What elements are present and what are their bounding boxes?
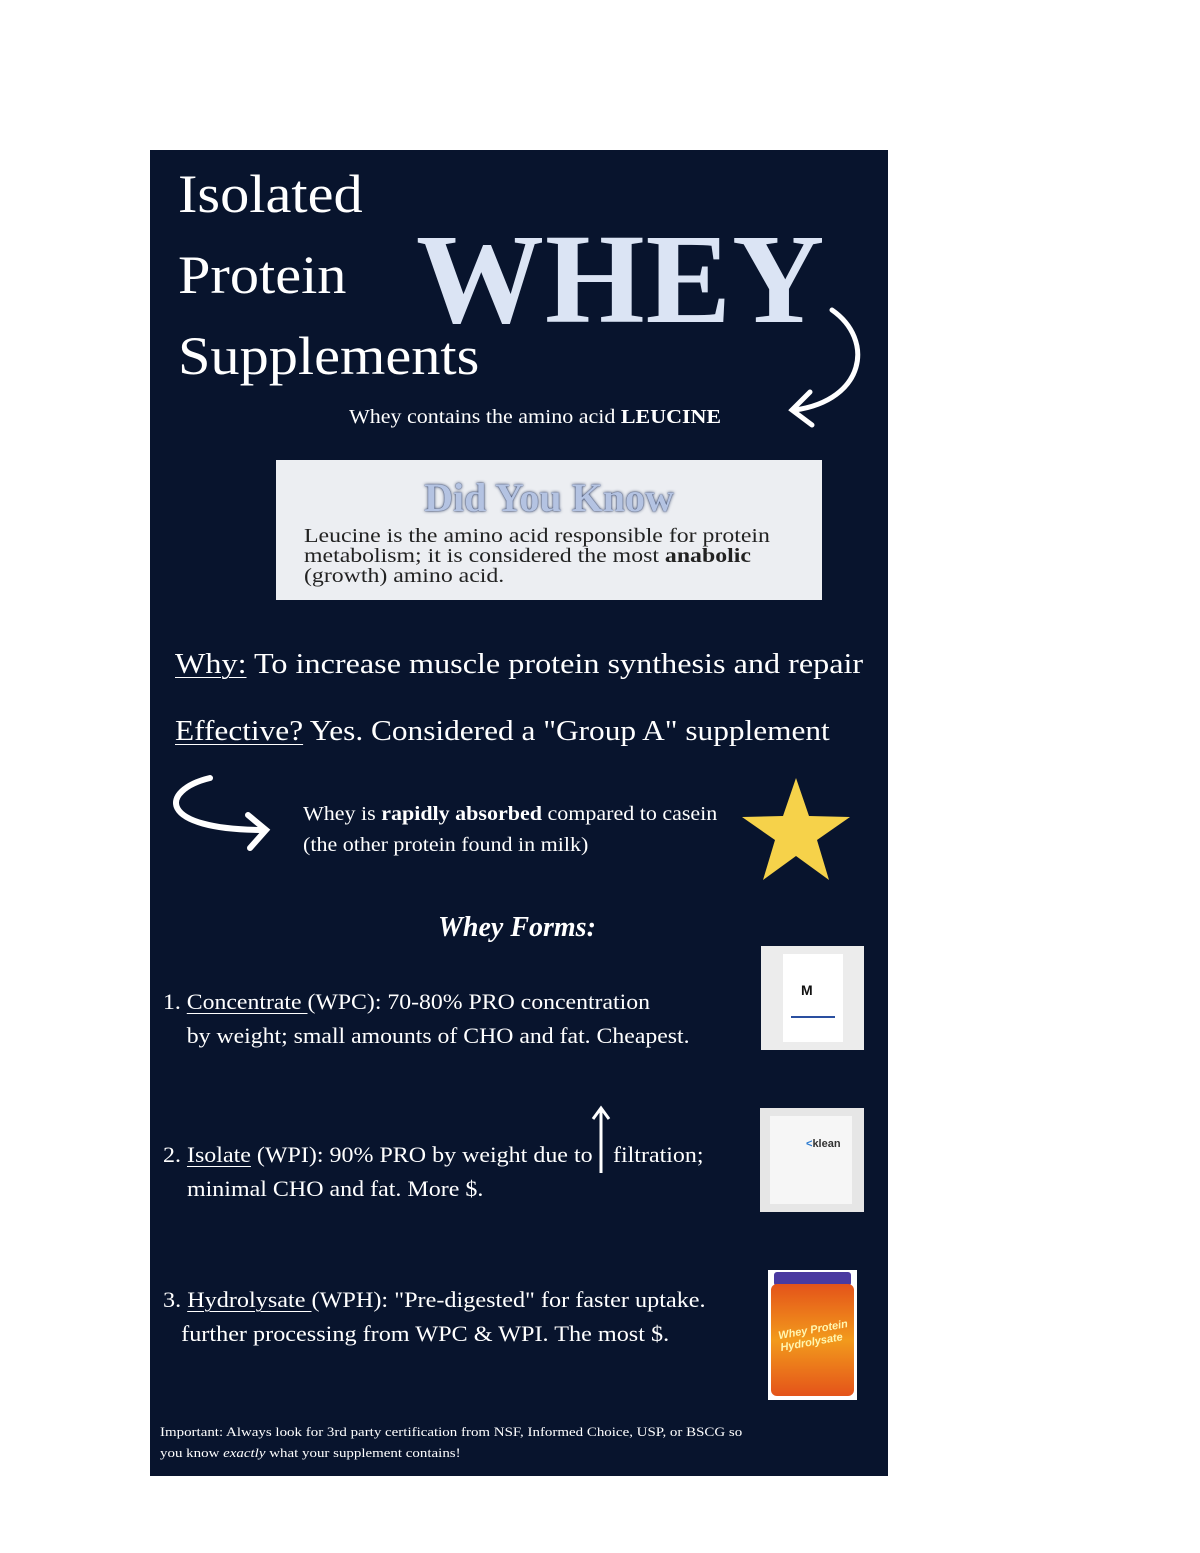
title: Isolated Protein Supplements: Supplements [178,326,479,386]
arrow: curved right [173,775,270,851]
text: footer note: Important: Always look for 3rd party certification from NSF, Informed Choice, USP, or BSCG so [160,1424,742,1439]
text: isolate: 2. Isolate (WPI): 90% PRO by weight due to [163,1142,593,1167]
arrow: curved to leucine [788,308,860,428]
text: concentrate: by weight; small amounts of CHO and fat. Cheapest. [187,1023,690,1048]
text: concentrate [163,989,690,1048]
text: rapidly absorbed: Whey is rapidly absorbed compared to casein [303,803,717,825]
heading: did you know: Did You Know [424,475,674,520]
text: leucine fact: metabolism; it is considered the most anabolic [304,545,751,567]
text: filtration: filtration; [613,1142,704,1167]
title: Isolated Protein Supplements: Protein [178,245,346,305]
text: hydrolysate: 3. Hydrolysate (WPH): "Pre-digested" for faster uptake. [163,1287,706,1312]
callout: did you know [276,460,822,600]
image: concentrate bag: M [801,982,813,998]
text: leucine fact: Leucine is the amino acid responsible for protein [304,525,770,547]
text: why: Why: To increase muscle protein synthesis and repair [175,648,863,680]
text: effective: Effective? Yes. Considered a "Group A" supplement [175,715,830,747]
text: concentrate: 1. Concentrate (WPC): 70-80% PRO concentration [163,989,650,1014]
text: footer note [160,1424,742,1460]
title: Isolated Protein Supplements [178,164,479,386]
heading: whey forms: Whey Forms: [438,912,596,943]
panel: background [150,150,888,1476]
arrow: up [592,1106,610,1173]
text: leucine fact: (growth) amino acid. [304,565,504,587]
text: isolate [163,1142,593,1201]
text: hydrolysate: further processing from WPC & WPI. The most $. [181,1321,669,1346]
image: hydrolysate jar: Hydrolysate [780,1331,844,1354]
image: hydrolysate jar: Whey Protein [777,1318,849,1342]
icon: star [742,778,850,880]
text: rapidly absorbed [303,803,717,856]
text: leucine fact [304,525,770,587]
image: concentrate bag [761,946,864,1050]
text: footer note: you know exactly what your supplement contains! [160,1445,461,1460]
text: isolate: minimal CHO and fat. More $. [187,1176,483,1201]
title: Isolated Protein Supplements: Isolated [178,164,363,224]
text: rapidly absorbed: (the other protein found in milk) [303,834,588,856]
text: leucine: Whey contains the amino acid LEUCINE [349,406,721,428]
image: isolate bag [760,1108,864,1212]
text: hydrolysate [163,1287,706,1346]
image: isolate bag: <klean [806,1138,841,1150]
image: hydrolysate jar [768,1270,857,1400]
heading: WHEY: WHEY [416,208,825,350]
